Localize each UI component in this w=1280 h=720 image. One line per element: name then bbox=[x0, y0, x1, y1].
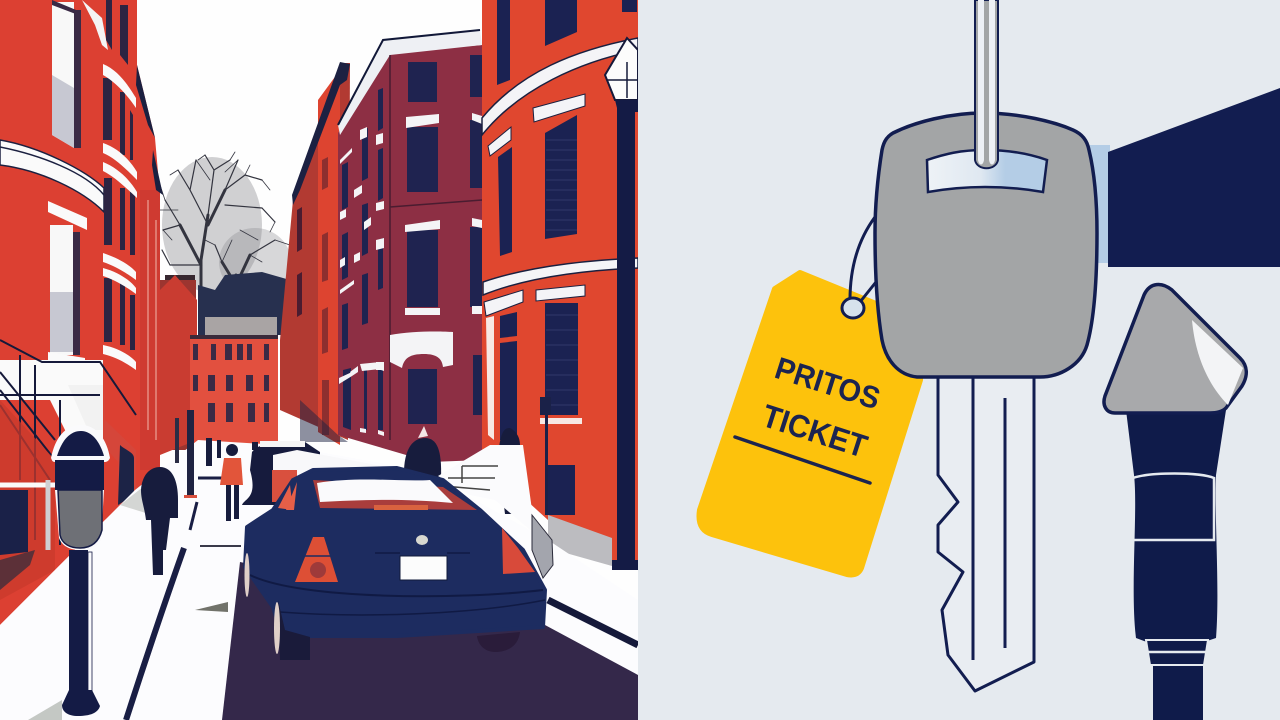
panel: street scene bbox=[0, 0, 638, 720]
black cornices bbox=[136, 65, 163, 195]
tree bbox=[160, 152, 291, 330]
parking meter bbox=[51, 425, 110, 716]
key ring strap bbox=[975, 0, 998, 168]
ticket text: PRITOS bbox=[771, 350, 884, 416]
pedestrians bbox=[141, 426, 527, 575]
curved band bbox=[0, 140, 104, 212]
building: left row bbox=[0, 0, 163, 625]
hand sleeve bbox=[1090, 88, 1280, 267]
stairs and railing bbox=[0, 360, 103, 440]
upper window bbox=[52, 2, 74, 148]
building: right foreground red bbox=[482, 0, 638, 570]
parking ticket tag bbox=[700, 217, 920, 574]
panel: key illustration background bbox=[638, 0, 1280, 720]
key head bbox=[875, 113, 1097, 377]
pedestrian: dark coat bbox=[141, 467, 178, 575]
tag string bbox=[850, 217, 876, 302]
distant rooftops bbox=[165, 272, 290, 336]
distant pedestrians bbox=[206, 438, 258, 466]
building: far end bbox=[160, 275, 278, 455]
rear wheels bbox=[278, 600, 310, 660]
side windows bbox=[103, 0, 135, 350]
lower window bbox=[50, 225, 73, 355]
shutter lines bbox=[546, 140, 578, 405]
key blade bbox=[938, 370, 1034, 691]
parked cars behind bbox=[242, 441, 400, 505]
lamp post: far bbox=[175, 410, 197, 498]
pedestrian: behind car bbox=[404, 438, 441, 478]
car bbox=[244, 468, 545, 660]
stairs right bbox=[438, 445, 532, 530]
lamp post bbox=[605, 38, 638, 570]
grey wall and doorway bbox=[548, 515, 612, 566]
pedestrian: right bbox=[498, 428, 527, 514]
parking ticket tag: TICKET bbox=[758, 397, 872, 465]
building: right maroon bbox=[280, 30, 482, 462]
street surface bbox=[0, 440, 638, 720]
pedestrian: orange coat bbox=[220, 444, 243, 521]
handle tool bbox=[1104, 285, 1246, 720]
